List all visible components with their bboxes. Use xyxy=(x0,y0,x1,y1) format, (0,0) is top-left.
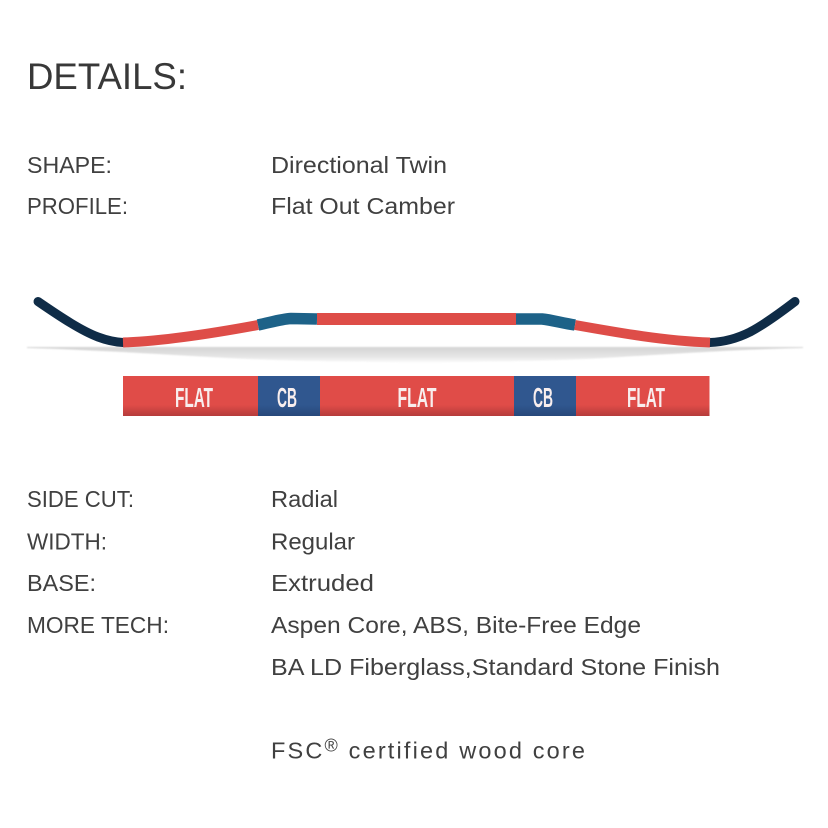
spec rows: side cut, width, base, more tech: Regular xyxy=(271,528,355,554)
spec rows: side cut, width, base, more tech: WIDTH: xyxy=(27,528,107,554)
spec rows: shape and profile: Flat Out Camber xyxy=(271,193,455,219)
spec rows: side cut, width, base, more tech: Extruded xyxy=(271,570,374,596)
spec rows: shape and profile: PROFILE: xyxy=(27,193,128,219)
profile bar: FLAT xyxy=(398,382,436,413)
ground shadow xyxy=(27,347,803,362)
profile bar: CB xyxy=(277,382,297,413)
spec rows: shape and profile: Directional Twin xyxy=(271,152,447,178)
spec rows: side cut, width, base, more tech xyxy=(27,486,720,680)
profile bar: CB xyxy=(533,382,553,413)
title: DETAILS: xyxy=(27,56,187,97)
spec rows: shape and profile: SHAPE: xyxy=(27,152,112,178)
certification note: ® xyxy=(325,736,338,756)
profile bar xyxy=(123,376,710,416)
spec rows: side cut, width, base, more tech: SIDE CUT: xyxy=(27,486,134,512)
spec rows: side cut, width, base, more tech: BASE: xyxy=(27,570,96,596)
spec rows: side cut, width, base, more tech: Radial xyxy=(271,486,338,512)
certification note: FSC xyxy=(271,738,322,764)
spec rows: side cut, width, base, more tech: MORE TECH: xyxy=(27,612,169,638)
profile bar: FLAT xyxy=(175,382,213,413)
spec rows: side cut, width, base, more tech: BA LD Fiberglass,Standard Stone Finish xyxy=(271,654,720,680)
spec rows: shape and profile xyxy=(27,152,455,219)
certification note: certified wood core xyxy=(340,738,585,764)
snowboard camber profile xyxy=(38,302,795,342)
profile bar: FLAT xyxy=(627,382,665,413)
spec rows: side cut, width, base, more tech: Aspen Core, ABS, Bite-Free Edge xyxy=(271,612,641,638)
